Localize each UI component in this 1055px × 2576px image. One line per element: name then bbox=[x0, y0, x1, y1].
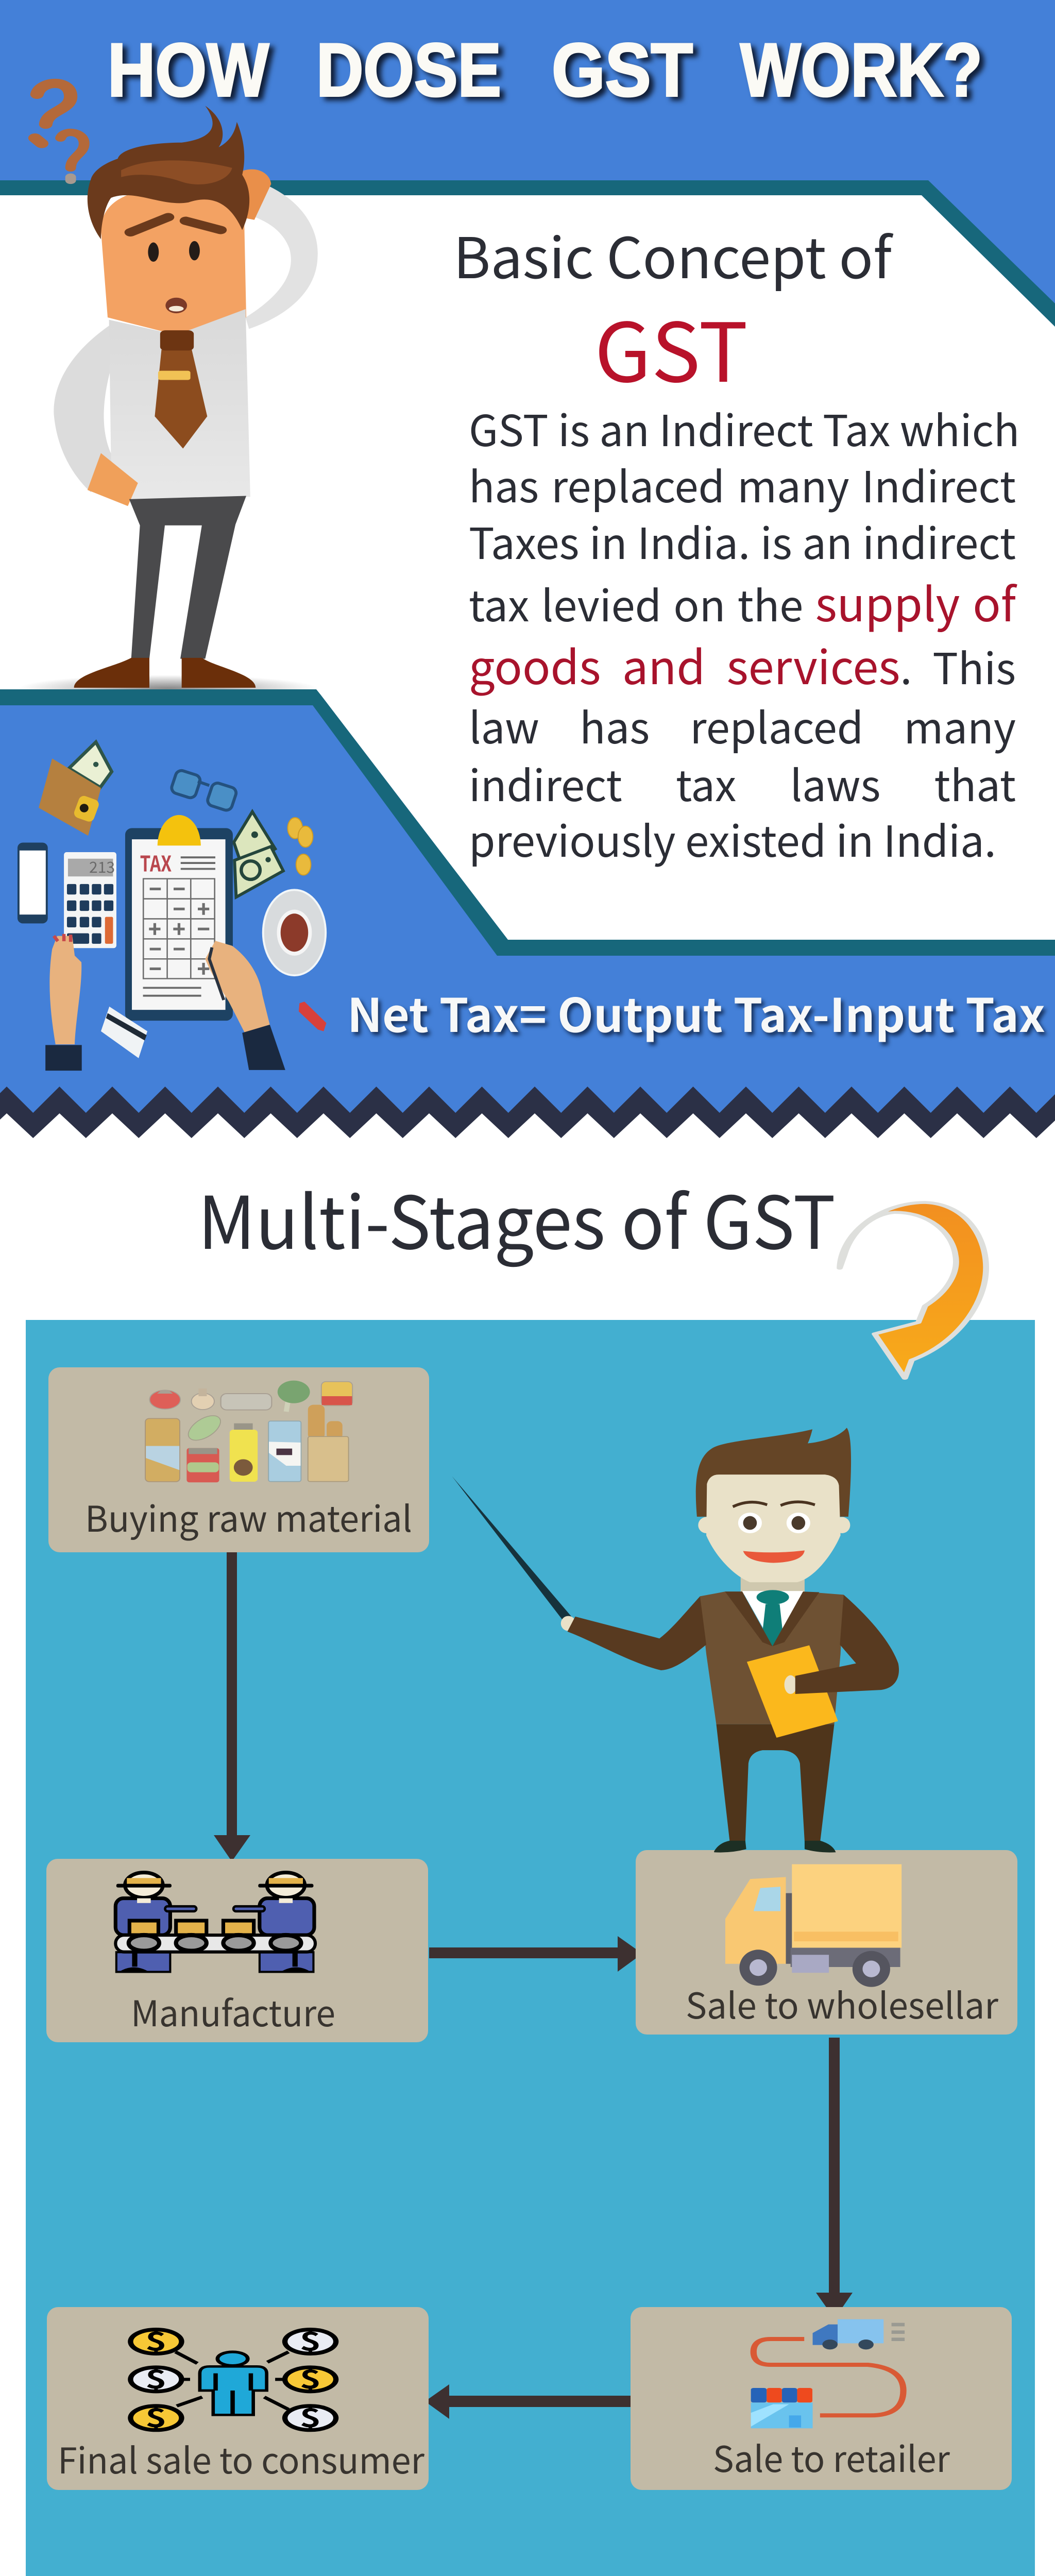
arrow: wholesaler to retailer bbox=[816, 2038, 853, 2319]
pointer bbox=[452, 1476, 571, 1622]
heading: GST: GST bbox=[594, 287, 748, 405]
eyes bbox=[148, 243, 159, 262]
text block: GST explanation: has replaced many Indirect bbox=[469, 453, 1016, 515]
panel: final sale to consumer bbox=[47, 2307, 429, 2490]
label: Final sale to consumer bbox=[58, 2432, 424, 2484]
text block: GST explanation: tax levied on the supply of bbox=[469, 568, 1016, 635]
hair bbox=[88, 106, 249, 239]
face bbox=[101, 189, 246, 335]
panel: manufacture bbox=[46, 1859, 428, 2042]
icon: delivery route bbox=[751, 2319, 905, 2428]
icon: consumer and coins: $ bbox=[300, 2321, 321, 2358]
icon: clipboard bbox=[125, 815, 233, 1021]
shirt bbox=[742, 1591, 804, 1646]
pointing hand bbox=[561, 1616, 576, 1631]
panel: stages background bbox=[26, 1320, 1035, 2576]
trousers bbox=[129, 496, 246, 659]
panel: buying raw material bbox=[48, 1367, 429, 1552]
icon: left hand bbox=[45, 934, 82, 1071]
hand on head bbox=[235, 170, 271, 220]
trousers bbox=[716, 1724, 834, 1841]
heading: Basic Concept of: Basic Concept of bbox=[453, 214, 894, 295]
arrow: manufacture to wholesaler bbox=[429, 1936, 642, 1972]
icon: consumer and coins: $ bbox=[145, 2397, 167, 2435]
panel: sale to retailer bbox=[631, 2307, 1012, 2490]
TAX label: TAX bbox=[140, 847, 172, 878]
icon: glasses bbox=[170, 769, 237, 812]
icon: consumer and coins bbox=[130, 2321, 336, 2435]
icon: presenter man bbox=[452, 1428, 899, 1853]
document bbox=[747, 1646, 838, 1738]
left arm bbox=[54, 324, 114, 492]
neck bbox=[741, 1576, 805, 1595]
tie bbox=[762, 1604, 783, 1646]
title: GST bbox=[552, 28, 693, 112]
icon group: tax desk bbox=[18, 742, 327, 1071]
icon: truck bbox=[725, 1864, 901, 1987]
face bbox=[706, 1475, 841, 1582]
icon: coins bbox=[287, 818, 313, 875]
text block: GST explanation: Taxes in India. is an indirect bbox=[469, 510, 1016, 571]
label: Sale to wholesellar bbox=[686, 1977, 998, 2029]
title bbox=[108, 28, 982, 112]
worker right bbox=[236, 1873, 314, 1972]
icon: consumer and coins: $ bbox=[145, 2321, 167, 2358]
shoes bbox=[74, 658, 149, 688]
title: WORK? bbox=[740, 28, 982, 112]
label: Manufacture bbox=[131, 1985, 335, 2037]
blue header background bbox=[0, 0, 1055, 1113]
arrow: raw material to manufacture bbox=[214, 1548, 250, 1861]
icon: right hand bbox=[205, 941, 285, 1070]
boxes bbox=[129, 1921, 254, 1935]
icon: groceries bbox=[145, 1381, 352, 1482]
eyes bbox=[733, 1502, 815, 1533]
icon: credit card bbox=[101, 1007, 147, 1058]
text block: GST explanation: previously existed in India. bbox=[469, 807, 996, 869]
icon: calculator bbox=[64, 852, 116, 948]
icon: confused man bbox=[35, 83, 318, 688]
zigzag divider bbox=[0, 1087, 1055, 1138]
icon: banknotes bbox=[234, 812, 283, 897]
icon: consumer and coins: $ bbox=[300, 2359, 321, 2396]
lower teal band bbox=[0, 689, 1055, 956]
icon: consumer and coins: $ bbox=[300, 2397, 321, 2435]
label: Sale to retailer bbox=[713, 2431, 950, 2482]
pointing arm bbox=[567, 1596, 706, 1670]
jacket bbox=[700, 1591, 844, 1724]
hand on hip bbox=[88, 453, 138, 506]
ears bbox=[698, 1517, 714, 1533]
figure shadow bbox=[19, 675, 317, 702]
hair bbox=[696, 1428, 851, 1517]
text block: GST explanation: indirect tax laws that bbox=[469, 752, 1016, 814]
panel: sale to wholesaler bbox=[636, 1850, 1017, 2035]
text block: GST explanation bbox=[469, 397, 1019, 869]
mouth bbox=[743, 1550, 805, 1563]
title: DOSE bbox=[316, 28, 501, 112]
eyebrows bbox=[130, 217, 220, 232]
icon: coffee cup bbox=[263, 890, 326, 975]
heading: Multi-Stages of GST: Multi-Stages of GST bbox=[198, 1164, 836, 1270]
raised arm bbox=[246, 187, 318, 329]
label: Buying raw material bbox=[85, 1490, 412, 1542]
arrow: retailer to consumer bbox=[425, 2384, 633, 2419]
hand bbox=[785, 1675, 797, 1694]
icon: question marks bbox=[35, 83, 84, 180]
net tax formula: Net Tax= Output Tax-Input Tax bbox=[347, 978, 1045, 1045]
icon: phone bbox=[18, 842, 48, 923]
worker left bbox=[115, 1873, 194, 1972]
shoes bbox=[714, 1841, 836, 1853]
icon: wallet bbox=[39, 742, 112, 836]
text block: GST explanation: law has replaced many bbox=[469, 694, 1016, 756]
tie bbox=[155, 350, 207, 449]
white content panel bbox=[0, 195, 1055, 940]
mouth bbox=[165, 298, 187, 313]
shirt bbox=[109, 309, 250, 499]
text block: GST explanation: GST is an Indirect Tax which bbox=[469, 397, 1019, 459]
conveyor bbox=[115, 1935, 315, 1952]
icon: consumer and coins: $ bbox=[145, 2359, 167, 2396]
holding arm bbox=[795, 1595, 899, 1694]
icon: calculator: 213 bbox=[89, 856, 115, 877]
icon: price tag bbox=[299, 1002, 327, 1031]
curved arrow bbox=[840, 1202, 986, 1378]
top teal band bbox=[0, 180, 1055, 327]
text block: GST explanation: goods and services. This bbox=[469, 631, 1016, 698]
title: HOW bbox=[108, 28, 269, 112]
icon: factory workers bbox=[115, 1873, 315, 1972]
